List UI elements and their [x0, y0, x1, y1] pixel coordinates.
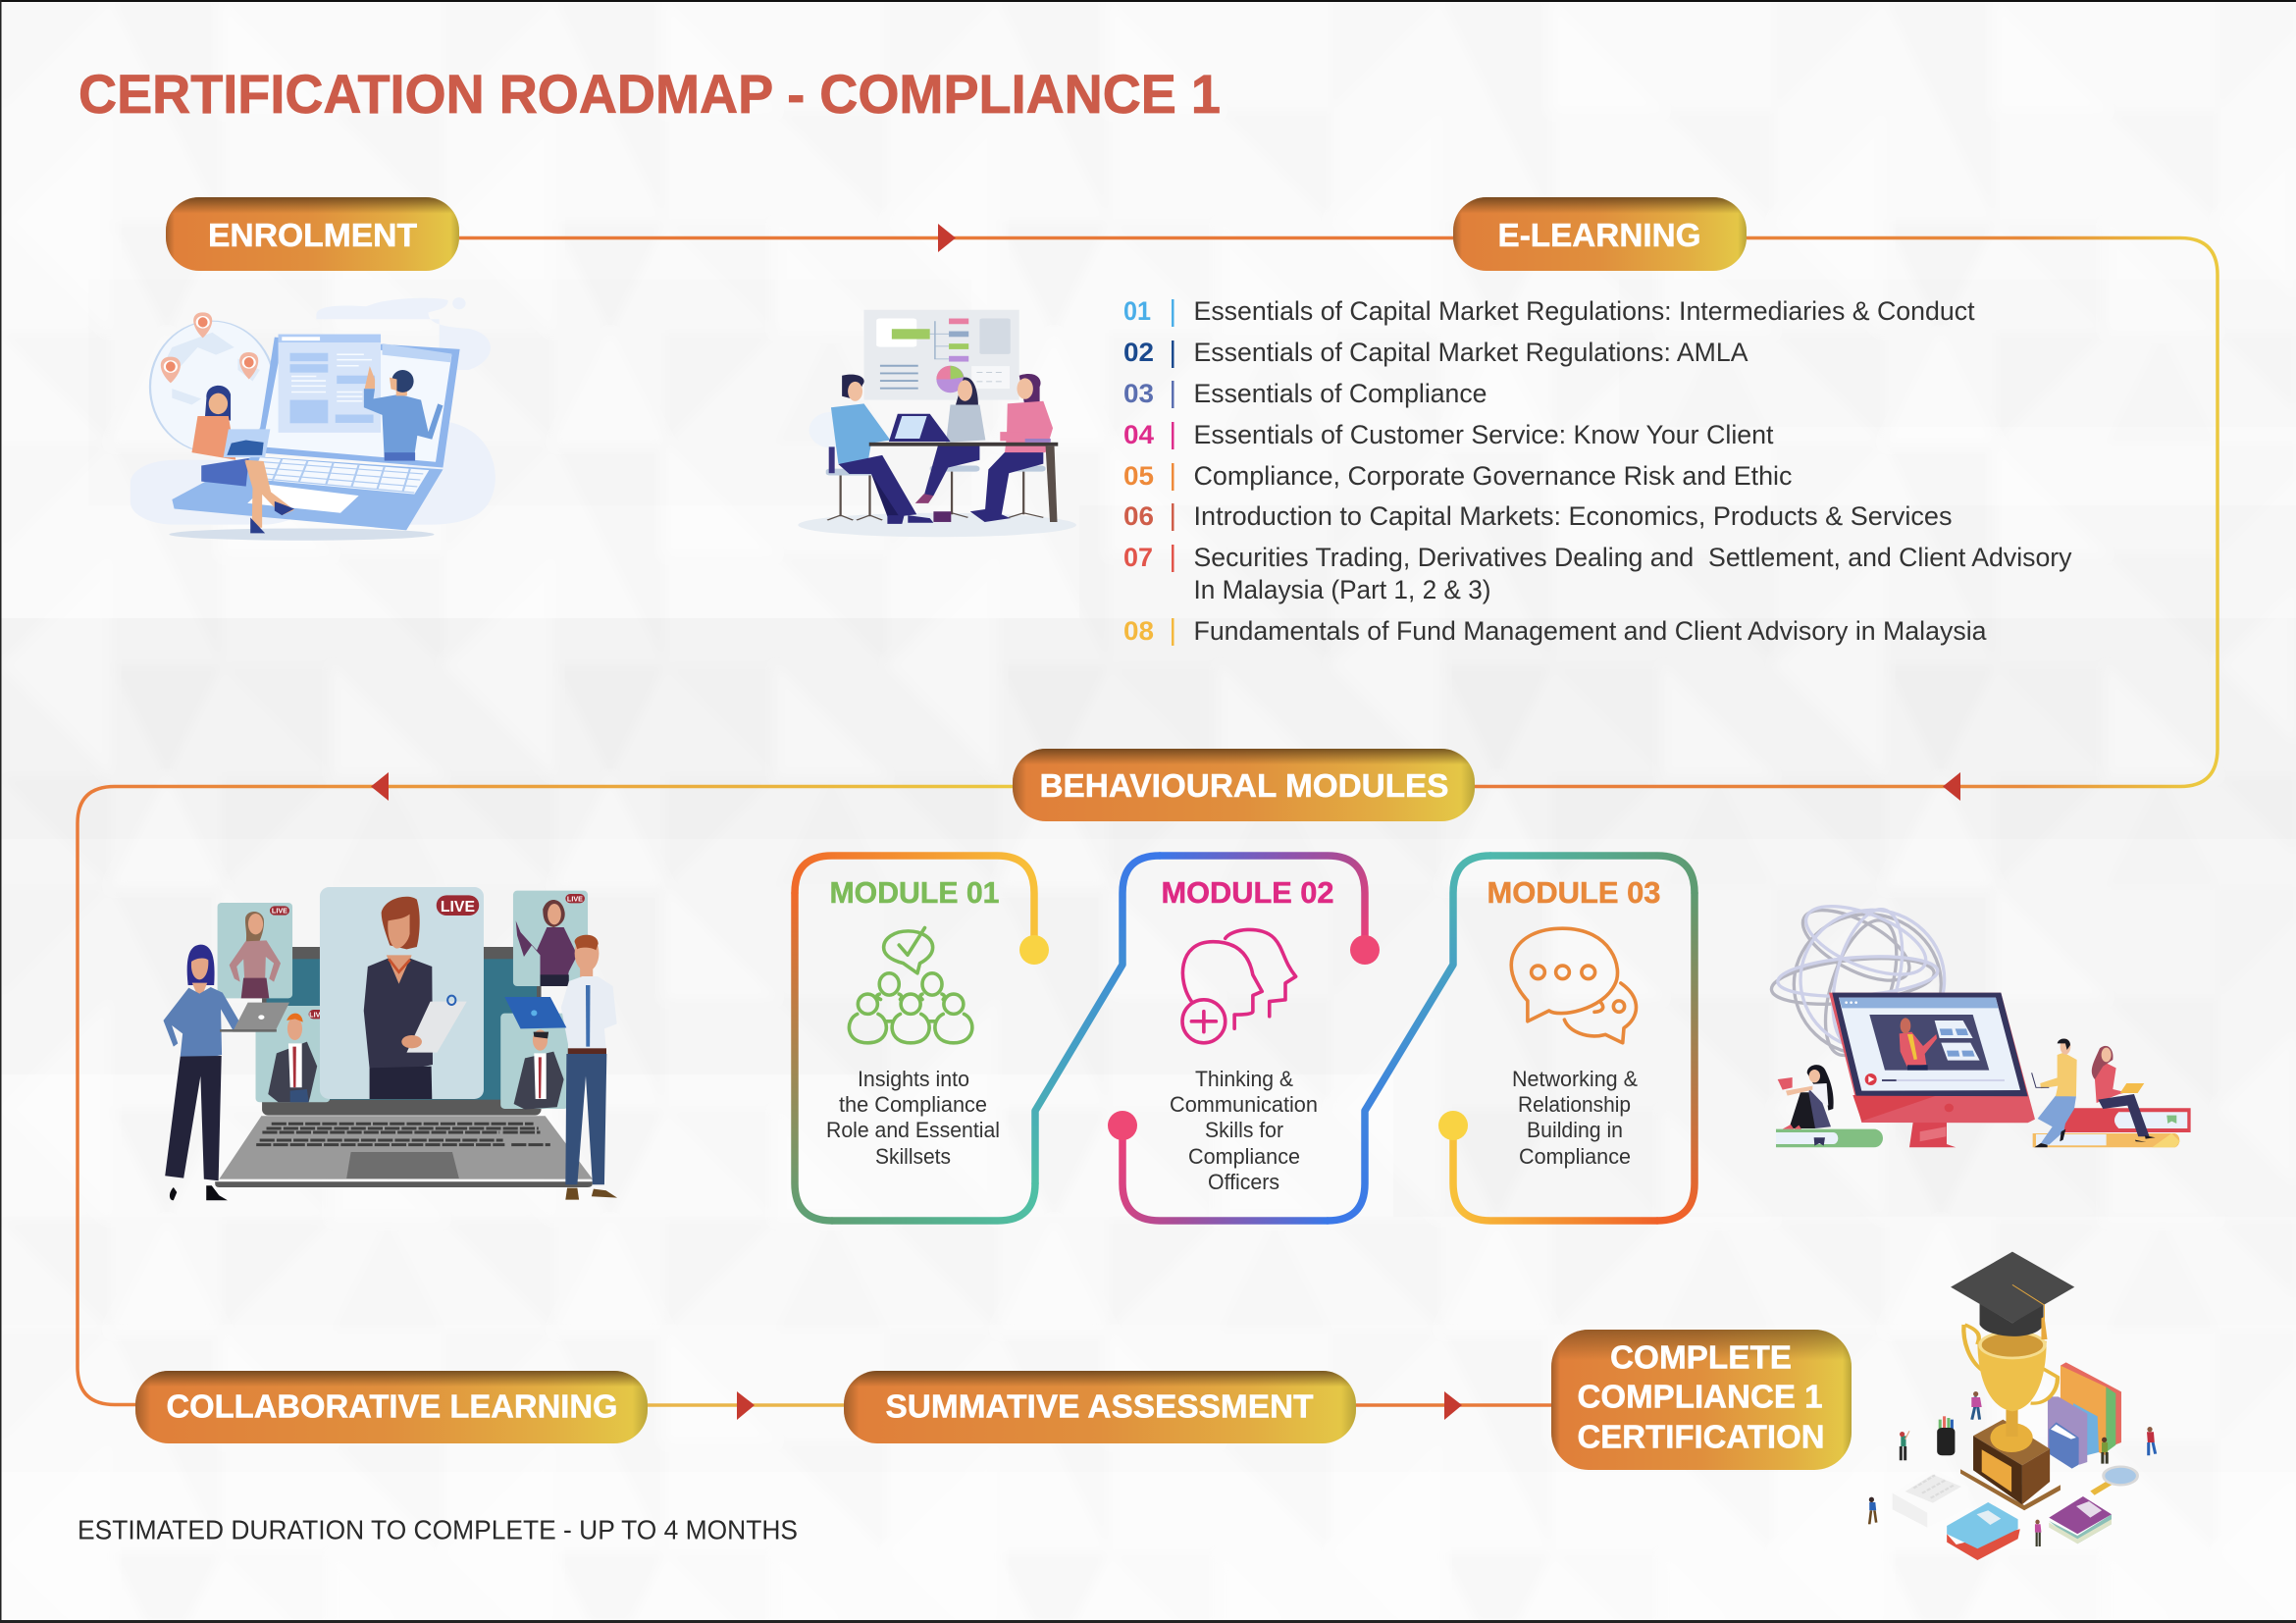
- module 2 description: Compliance: [1188, 1144, 1300, 1169]
- module 2 description: Thinking &: [1195, 1067, 1293, 1091]
- course 01: 01: [1123, 296, 1151, 326]
- illustration: team meeting with chart board: [798, 310, 1076, 537]
- e-learning course list: [1123, 296, 2072, 646]
- course 04: Essentials of Customer Service: Know Your Client: [1193, 420, 1774, 449]
- pill: e-learning: E-LEARNING: [1497, 217, 1701, 253]
- course 02: Essentials of Capital Market Regulations: AMLA: [1193, 338, 1748, 367]
- course 07: [1123, 543, 2072, 604]
- pill: enrolment: [166, 197, 459, 271]
- course 01: Essentials of Capital Market Regulations: Intermediaries & Conduct: [1193, 296, 1975, 326]
- arrow: to summative assessment: [737, 1391, 755, 1420]
- illustration: live online class on laptop: LIVE: [441, 899, 475, 916]
- module 1 description: Role and Essential: [826, 1118, 1000, 1142]
- course 05: Compliance, Corporate Governance Risk and Ethic: [1193, 461, 1792, 491]
- course 07: Securities Trading, Derivatives Dealing and Settlement, and Client Advisory: [1193, 543, 2072, 572]
- roadmap connector: enrolment to e-learning: [459, 236, 1453, 239]
- module 1 description: [826, 1067, 1000, 1169]
- course 08: Fundamentals of Fund Management and Client Advisory in Malaysia: [1193, 616, 1987, 646]
- pill: complete compliance 1 certification: CERTIFICATION: [1578, 1419, 1825, 1454]
- course 04: 04: [1123, 420, 1154, 449]
- course 08: 08: [1123, 616, 1154, 646]
- duration note: ESTIMATED DURATION TO COMPLETE - UP TO 4 MONTHS: [78, 1515, 798, 1544]
- roadmap connector: behavioural modules to collaborative learning: [78, 787, 1013, 1405]
- module 2 description: Officers: [1208, 1170, 1279, 1194]
- pill: complete compliance 1 certification: COMPLIANCE 1: [1578, 1378, 1823, 1415]
- arrow: to certification: [1444, 1391, 1462, 1420]
- illustration: trophy, graduation cap and books: [1869, 1252, 2156, 1560]
- module 3 description: Relationship: [1518, 1092, 1631, 1117]
- arrow: to behavioural modules: [1943, 772, 1960, 801]
- icon: heads with plus: [1182, 929, 1296, 1043]
- module 3 description: Building in: [1527, 1118, 1623, 1142]
- course 06: 06: [1123, 501, 1154, 531]
- arrow: to e-learning: [938, 224, 956, 252]
- pill: collaborative learning: COLLABORATIVE LEARNING: [167, 1387, 618, 1425]
- pill: enrolment: ENROLMENT: [208, 217, 417, 253]
- module 3 description: [1512, 1067, 1638, 1169]
- course 07: In Malaysia (Part 1, 2 & 3): [1193, 575, 1491, 604]
- module 2 description: [1170, 1067, 1318, 1194]
- pill: complete compliance 1 certification: [1551, 1330, 1852, 1470]
- pill: collaborative learning: [135, 1371, 648, 1443]
- illustration: live online class on laptop: LIVE: [309, 1011, 325, 1019]
- pill: behavioural modules: BEHAVIOURAL MODULES: [1040, 767, 1448, 804]
- course 05: 05: [1123, 461, 1154, 491]
- module 1 card: [795, 856, 1049, 1221]
- course 06: Introduction to Capital Markets: Economics, Products & Services: [1193, 501, 1953, 531]
- illustration: enrolment laptop and globe: [130, 297, 496, 541]
- module 1 description: Insights into: [858, 1067, 969, 1091]
- illustration: live online class on laptop: LIVE: [567, 895, 583, 903]
- module 3 card: [1438, 856, 1695, 1221]
- pill: summative assessment: SUMMATIVE ASSESSMENT: [885, 1387, 1313, 1425]
- icon: people group with check bubble: [849, 928, 972, 1043]
- course 02: 02: [1123, 338, 1154, 367]
- module 3 description: Networking &: [1512, 1067, 1638, 1091]
- module 2 card: [1108, 856, 1380, 1221]
- roadmap connector: e-learning to behavioural modules: [1475, 237, 2218, 787]
- pill: behavioural modules: [1013, 749, 1475, 821]
- illustration: globe, monitor video lesson and students on books: [1769, 892, 2191, 1147]
- connector: module 2 to module 3: [1328, 856, 1490, 1221]
- icon: speech bubbles: [1511, 928, 1637, 1043]
- course 07: 07: [1123, 543, 1153, 572]
- pill: e-learning: [1453, 197, 1747, 271]
- course 03: Essentials of Compliance: [1193, 379, 1487, 408]
- arrow: to collaborative learning: [371, 772, 389, 801]
- roadmap connector: summative assessment to certification: [1356, 1403, 1551, 1407]
- pill: complete compliance 1 certification: COMPLETE: [1610, 1338, 1792, 1376]
- illustration: live online class on laptop: [163, 887, 617, 1200]
- connector: module 1 to module 2: [1035, 856, 1160, 1183]
- title: CERTIFICATION ROADMAP - COMPLIANCE 1: [78, 63, 1221, 125]
- module 3 card: MODULE 03: [1487, 875, 1660, 910]
- module 1 description: the Compliance: [839, 1092, 987, 1117]
- module 2 description: Skills for: [1205, 1118, 1283, 1142]
- illustration: live online class on laptop: LIVE: [272, 908, 287, 916]
- course 03: 03: [1123, 379, 1154, 408]
- module 2 card: MODULE 02: [1162, 875, 1334, 910]
- module 1 card: MODULE 01: [830, 875, 999, 910]
- module 2 description: Communication: [1170, 1092, 1318, 1117]
- roadmap connector: collaborative learning to summative assessment: [648, 1403, 844, 1407]
- module 3 description: Compliance: [1519, 1144, 1631, 1169]
- module 1 description: Skillsets: [875, 1144, 951, 1169]
- pill: summative assessment: [844, 1371, 1356, 1443]
